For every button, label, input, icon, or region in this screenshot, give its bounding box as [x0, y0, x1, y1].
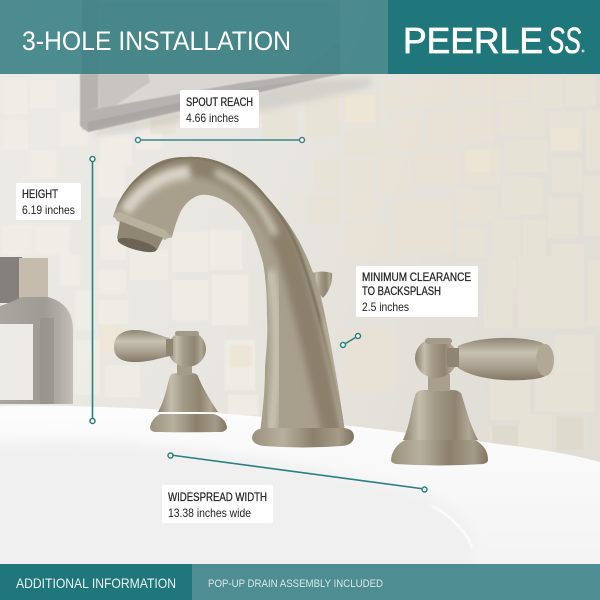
title: 3-HOLE INSTALLATION — [22, 26, 291, 56]
label: height: 6.19 inches — [22, 203, 75, 217]
label: height: HEIGHT — [22, 187, 59, 201]
mirror frame — [80, 0, 372, 135]
header band — [0, 0, 600, 74]
label: height — [16, 183, 81, 220]
footer text: POP-UP DRAIN ASSEMBLY INCLUDED — [208, 578, 383, 590]
label: minimum clearance — [356, 266, 478, 317]
faucet — [100, 150, 554, 466]
label: widespread width: WIDESPREAD WIDTH — [168, 490, 267, 504]
label: widespread width: 13.38 inches wide — [168, 506, 251, 520]
label: minimum clearance: MINIMUM CLEARANCE — [362, 270, 471, 284]
wall background — [0, 0, 600, 480]
label: widespread width — [162, 485, 273, 523]
label: spout reach: 4.66 inches — [186, 111, 239, 125]
dimension: clearance line — [340, 334, 360, 348]
label: minimum clearance: TO BACKSPLASH — [362, 284, 441, 298]
label: minimum clearance: 2.5 inches — [362, 300, 409, 314]
dimension: width line — [168, 453, 427, 492]
faucet: back lift knob — [312, 272, 332, 298]
label: spout reach: SPOUT REACH — [186, 95, 253, 109]
faucet: right handle — [391, 338, 554, 466]
faucet: left handle — [114, 330, 227, 433]
dimension: spout reach line — [136, 138, 304, 142]
sink basin — [0, 406, 600, 600]
logo: Peerless: SS — [548, 20, 581, 61]
label: spout reach — [180, 90, 259, 128]
footer band — [0, 564, 600, 600]
footer heading: ADDITIONAL INFORMATION — [16, 575, 176, 591]
logo: Peerless: PEERLE — [403, 20, 543, 61]
dimension: height line — [90, 156, 95, 424]
faucet: spout body — [100, 150, 360, 448]
soap bottle — [0, 257, 73, 404]
